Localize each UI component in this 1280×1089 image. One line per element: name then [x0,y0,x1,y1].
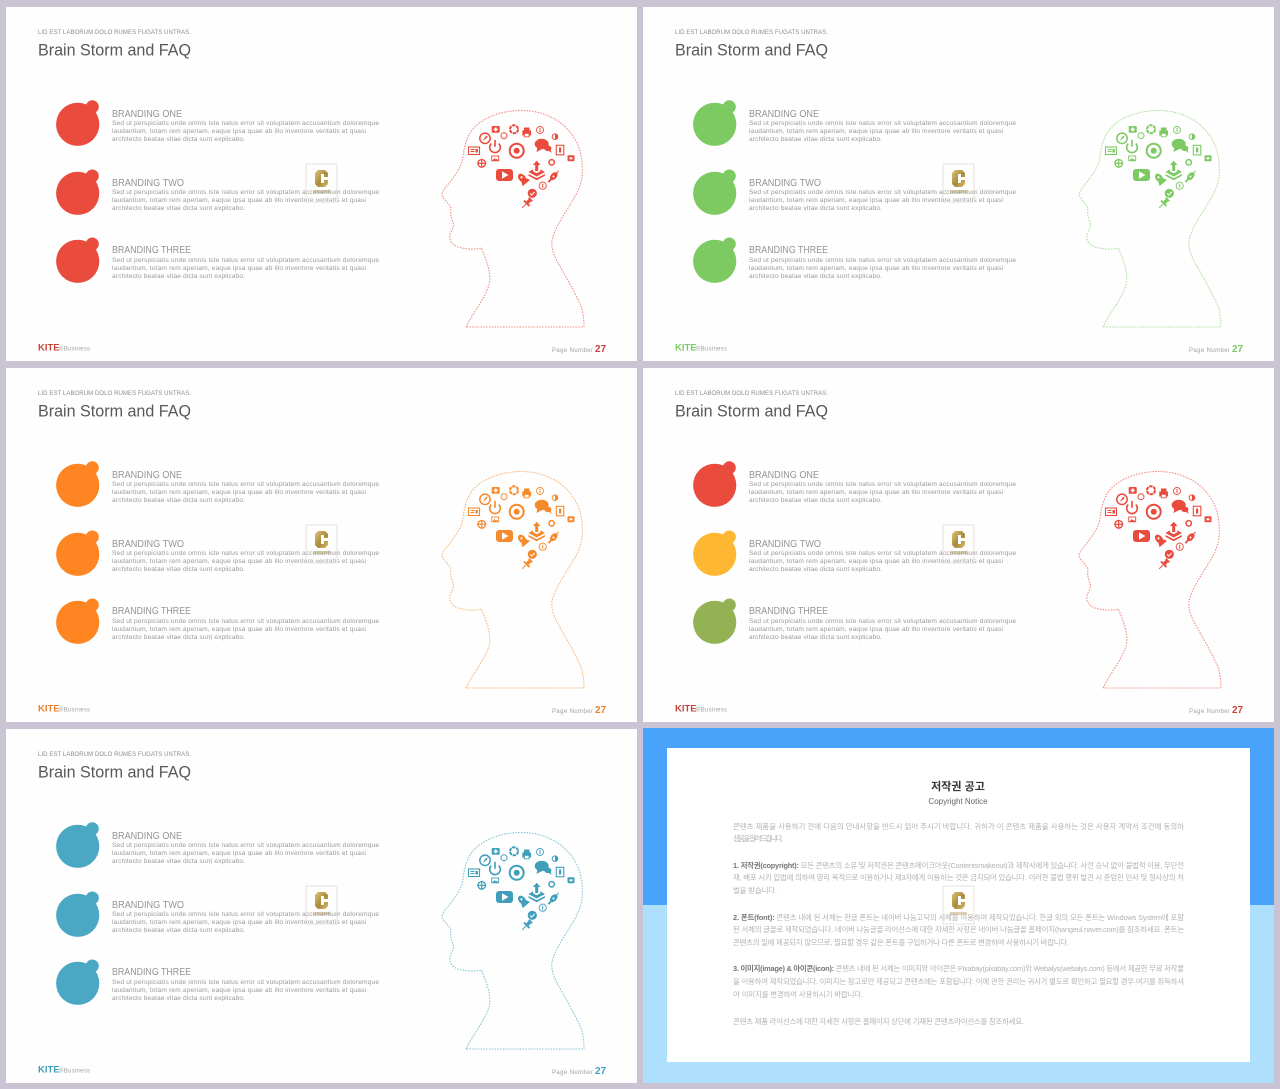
footer logo: KITE [38,1064,60,1076]
notice heading: 저작권 공고 [931,779,985,793]
text block: branding three: BRANDING THREE [112,967,191,978]
footer logo: KITE [38,342,60,354]
text block: branding one: architecto beatae vitae dicta sunt explicabo. [112,858,245,865]
page number: Page Number [1189,348,1230,354]
text block: font: 2. 폰트(font): 콘텐츠 내에 된 서체는 한글 폰트는 네이버 나눔고딕의 서체를 이용하여 제작되었습니다. 한글 외의 모든 폰트는 Windows System에 포함 [733,913,1184,922]
text block: branding two: laudantium, totam rem aperiam, eaque ipsa quae ab illo inventore veritatis et quasi [112,197,367,204]
page number: Page Number [552,1070,593,1076]
footer logo [38,704,90,714]
icon: bubble three [56,238,99,283]
text block: branding three [112,245,379,280]
text block: branding one: Sed ut perspiciatis unde omnis iste natus error sit voluptatem accusantium doloremque [749,120,1016,127]
footer logo: ®Business [59,706,90,714]
page number: 27 [595,705,607,716]
text block: branding two: laudantium, totam rem aperiam, eaque ipsa quae ab illo inventore veritatis et quasi [112,919,367,926]
panel: orange slide [6,368,637,722]
panel: multicolour slide [643,368,1274,722]
title: Brain Storm and FAQ [38,40,191,60]
text block: font: 콘텐츠의 일에 제공되지 않으므로, 필요할 경우 같은 폰트를 구입하거나 다른 폰트로 변경하여 사용하시기 바랍니다. [733,938,1069,947]
icon: head with brain icons [1079,471,1221,688]
footer logo: ®Business [59,1068,90,1074]
icon: bubble one [56,822,99,868]
text block: intro: 셨음을 알려드립니다. [733,834,783,843]
text block: branding one: BRANDING ONE [112,109,182,120]
text block: branding three: BRANDING THREE [749,245,828,256]
title: Brain Storm and FAQ [675,402,828,420]
text block: branding two: architecto beatae vitae dicta sunt explicabo. [112,205,245,212]
text block: branding three: Sed ut perspiciatis unde omnis iste natus error sit voluptatem accusantium doloremque [749,257,1016,264]
icon: bubble two [56,530,99,576]
text block: branding one: Sed ut perspiciatis unde omnis iste natus error sit voluptatem accusantium doloremque [112,481,379,488]
text block: branding three: architecto beatae vitae dicta sunt explicabo. [749,273,882,280]
eyebrow text: LID EST LABORUM DOLO RUMES FUGATS UNTRAS. [38,391,191,397]
page number: Page Number [1189,709,1230,715]
text block: branding one: Sed ut perspiciatis unde omnis iste natus error sit voluptatem accusantium doloremque [749,481,1016,488]
text block: branding three: Sed ut perspiciatis unde omnis iste natus error sit voluptatem accusantium doloremque [749,618,1016,625]
icon: head with brain icons [442,110,584,327]
page number: 27 [1232,705,1244,716]
text block: branding one: laudantium, totam rem aperiam, eaque ipsa quae ab illo inventore veritatis et quasi [749,489,1004,496]
text block: branding two: BRANDING TWO [112,900,184,911]
page number: 27 [1232,344,1244,355]
text block: branding three: laudantium, totam rem aperiam, eaque ipsa quae ab illo inventore veritatis et quasi [749,265,1004,272]
footer logo [38,342,90,354]
text block: branding two: Sed ut perspiciatis unde omnis iste natus error sit voluptatem accusantium doloremque [749,550,1016,557]
text block: branding two: architecto beatae vitae dicta sunt explicabo. [112,566,245,573]
footer logo: ®Business [696,706,727,714]
text block: branding three: architecto beatae vitae dicta sunt explicabo. [749,634,882,641]
text block: branding one: laudantium, totam rem aperiam, eaque ipsa quae ab illo inventore veritatis et quasi [112,850,367,857]
text block: font: 된 서체의 글꼴로 제작되었습니다. 네이버 나눔글꼴 라이선스에 대한 자세한 사항은 네이버 나눔글꼴 홈페이지(hangeul.naver.com)를 참조하세요. 폰트는 [733,925,1184,934]
text block: branding one: laudantium, totam rem aperiam, eaque ipsa quae ab illo inventore veritatis et quasi [112,489,367,496]
text block: branding one: architecto beatae vitae dicta sunt explicabo. [112,497,245,504]
icon: bubble three [56,598,99,644]
text block: branding three: Sed ut perspiciatis unde omnis iste natus error sit voluptatem accusantium doloremque [112,257,379,264]
text block: copyright: 1. 저작권(copyright): 모든 콘텐츠의 소유 및 저작권은 콘텐츠메이크아웃(Contentsmakeout)과 제작사에게 있습니다. 사전 승낙 없이 불법적 이용, 무단전 [733,861,1184,870]
text block: branding three [749,245,1016,280]
text block: branding three: architecto beatae vitae dicta sunt explicabo. [112,634,245,641]
text block: branding two [749,539,1016,573]
title: Brain Storm and FAQ [38,762,191,782]
eyebrow text: LID EST LABORUM DOLO RUMES FUGATS UNTRAS. [675,30,828,36]
page number: 27 [595,1066,607,1077]
text block: branding two: laudantium, totam rem aperiam, eaque ipsa quae ab illo inventore veritatis et quasi [749,558,1004,565]
page number [552,705,607,716]
footer logo: ®Business [696,346,727,352]
text block: branding two: BRANDING TWO [112,178,184,189]
text block: branding one: architecto beatae vitae dicta sunt explicabo. [749,497,882,504]
footer logo [675,342,727,354]
text block: branding three: laudantium, totam rem aperiam, eaque ipsa quae ab illo inventore veritatis et quasi [112,626,367,633]
text block: branding one: BRANDING ONE [749,470,819,481]
text block: branding two: BRANDING TWO [749,539,821,550]
page number [552,1066,607,1077]
footer logo: ®Business [59,346,90,352]
title: Brain Storm and FAQ [38,402,191,420]
icon: bubble one [56,100,99,146]
panel: teal slide [6,729,637,1083]
text block: branding three [749,606,1016,641]
text block: branding one: BRANDING ONE [112,831,182,842]
text block: branding two: Sed ut perspiciatis unde omnis iste natus error sit voluptatem accusantium doloremque [112,550,379,557]
page number [1189,344,1244,355]
text block: branding two: architecto beatae vitae dicta sunt explicabo. [749,566,882,573]
text block: branding two: Sed ut perspiciatis unde omnis iste natus error sit voluptatem accusantium doloremque [112,911,379,918]
text block: branding two [112,900,379,934]
page number: 27 [595,344,607,355]
text block: branding two: Sed ut perspiciatis unde omnis iste natus error sit voluptatem accusantium doloremque [112,189,379,196]
text block: branding one: architecto beatae vitae dicta sunt explicabo. [112,136,245,143]
page number: Page Number [552,709,593,715]
text block: copyright: 재, 배포 시키 입법에 의하여 영리 목적으로 이용하거나 제3자에게 이용하는 것은 금지되어 있습니다. 이러한 불법 행위 발견 시 준엄한 민사 및 형사상의 처 [733,873,1184,882]
text block: branding one: laudantium, totam rem aperiam, eaque ipsa quae ab illo inventore veritatis et quasi [112,128,367,135]
icon: bubble one [693,100,736,146]
icon: head with brain icons [1079,110,1221,327]
text block: branding two: laudantium, totam rem aperiam, eaque ipsa quae ab illo inventore veritatis et quasi [749,197,1004,204]
text block: branding three: BRANDING THREE [112,245,191,256]
footer logo [38,1064,90,1076]
watermark [306,886,337,924]
text block: branding one: BRANDING ONE [112,470,182,481]
text block: intro [733,822,1184,843]
watermark [943,525,974,563]
text block: branding two: BRANDING TWO [749,178,821,189]
icon: head with brain icons [442,471,584,688]
text block: branding three [112,606,379,641]
icon: bubble two [56,892,99,937]
watermark [943,886,974,924]
panel: green slide [643,7,1274,361]
text block: branding two: BRANDING TWO [112,539,184,550]
icon: bubble two [693,170,736,215]
panel: copyright notice [643,728,1274,1083]
text block: branding one: architecto beatae vitae dicta sunt explicabo. [749,136,882,143]
text block: copyright [733,861,1184,895]
text block: branding three: BRANDING THREE [749,606,828,617]
watermark [306,164,337,202]
watermark [306,525,337,563]
text block: branding one: Sed ut perspiciatis unde omnis iste natus error sit voluptatem accusantium doloremque [112,842,379,849]
text block: branding two [112,178,379,212]
page number: Page Number [552,348,593,354]
text block: image and icon: 야 이미지를 변경하여 사용하시기 바랍니다. [733,990,863,999]
text block: branding one [112,470,379,504]
text block: branding three: laudantium, totam rem aperiam, eaque ipsa quae ab illo inventore veritatis et quasi [112,265,367,272]
text block: branding two: architecto beatae vitae dicta sunt explicabo. [112,927,245,934]
text block: branding one: laudantium, totam rem aperiam, eaque ipsa quae ab illo inventore veritatis et quasi [749,128,1004,135]
text block: branding three: laudantium, totam rem aperiam, eaque ipsa quae ab illo inventore veritatis et quasi [749,626,1004,633]
text block: branding three: laudantium, totam rem aperiam, eaque ipsa quae ab illo inventore veritatis et quasi [112,987,367,994]
text block: branding one [112,109,379,143]
text block: branding one: Sed ut perspiciatis unde omnis iste natus error sit voluptatem accusantium doloremque [112,120,379,127]
text block: image and icon [733,964,1184,999]
watermark [943,164,974,202]
panel: red slide [6,7,637,361]
text block: branding three: BRANDING THREE [112,606,191,617]
notice subheading: Copyright Notice [928,797,988,806]
icon: bubble one [56,461,99,507]
icon: head with brain icons [442,832,584,1049]
footer logo [675,704,727,714]
icon: bubble three [56,960,99,1005]
text block: intro: 콘텐츠 제품을 사용하기 전에 다음의 안내사항을 반드시 읽어 주시기 바랍니다. 귀하가 이 콘텐츠 제품을 사용하는 것은 사용자 계약서 조건에 동의하 [733,822,1184,831]
icon: bubble two [56,170,99,215]
icon: bubble three [693,238,736,283]
page number [552,344,607,355]
text block: image and icon: 을 이용하여 제작되었습니다. 이미지는 참고로만 제공되고 콘텐츠에는 포함됩니다. 이에 관한 권리는 귀사가 별도로 확인하고 필요할 경우 여기를 취득하셔 [733,977,1184,986]
text block: copyright: 벌을 받습니다. [733,886,777,895]
text block: branding three: Sed ut perspiciatis unde omnis iste natus error sit voluptatem accusantium doloremque [112,979,379,986]
text block: branding one [749,109,1016,143]
icon: bubble two [693,530,736,576]
text block: branding three: Sed ut perspiciatis unde omnis iste natus error sit voluptatem accusantium doloremque [112,618,379,625]
text block: branding two [112,539,379,573]
text block: branding two: architecto beatae vitae dicta sunt explicabo. [749,205,882,212]
page number [1189,705,1244,716]
text block: branding one [112,831,379,865]
title: Brain Storm and FAQ [675,40,828,60]
text block: branding three: architecto beatae vitae dicta sunt explicabo. [112,995,245,1002]
icon: bubble one [693,461,736,507]
eyebrow text: LID EST LABORUM DOLO RUMES FUGATS UNTRAS. [675,391,828,397]
text block: branding three: architecto beatae vitae dicta sunt explicabo. [112,273,245,280]
footer logo: KITE [675,704,697,714]
text block: branding one [749,470,1016,504]
text block: branding one: BRANDING ONE [749,109,819,120]
text block: branding three [112,967,379,1002]
footer logo: KITE [38,704,60,714]
eyebrow text: LID EST LABORUM DOLO RUMES FUGATS UNTRAS. [38,752,191,758]
text block: branding two: Sed ut perspiciatis unde omnis iste natus error sit voluptatem accusantium doloremque [749,189,1016,196]
text block: license note: 콘텐츠 제품 라이선스에 대한 자세한 사항은 홈페이지 상단에 기재된 콘텐츠라이선스를 참조하세요. [733,1017,1024,1026]
text block: branding two [749,178,1016,212]
footer logo: KITE [675,342,697,354]
text block: branding two: laudantium, totam rem aperiam, eaque ipsa quae ab illo inventore veritatis et quasi [112,558,367,565]
eyebrow text: LID EST LABORUM DOLO RUMES FUGATS UNTRAS. [38,30,191,36]
text block: image and icon: 3. 이미지(image) & 아이콘(icon): 콘텐츠 내에 된 서체는 이미지와 아이콘은 Pixabay(pixabay.com)와 Webalys(webalys.com) 등에서 제공한 무료 저작물 [733,964,1184,973]
text block: font [733,913,1184,947]
icon: bubble three [693,598,736,644]
